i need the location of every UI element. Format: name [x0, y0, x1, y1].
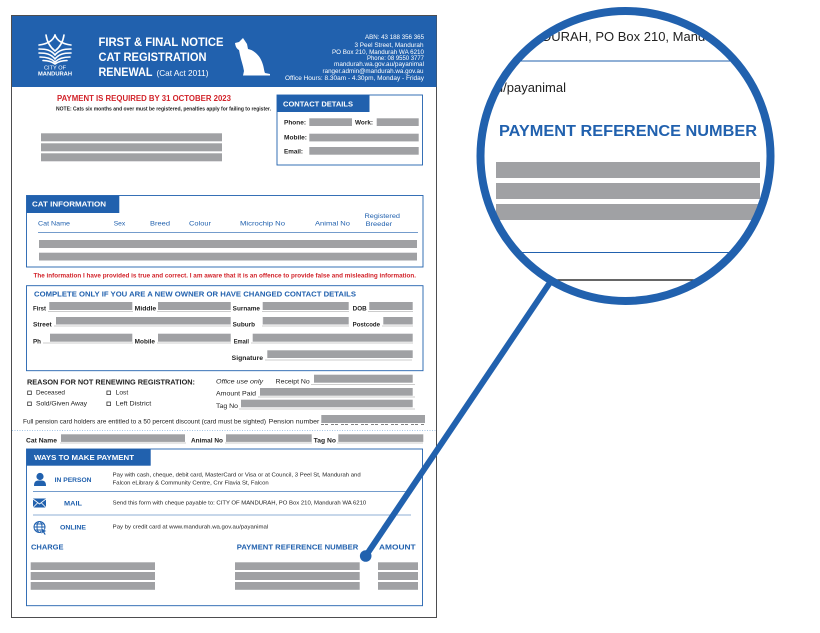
- payment table labels: PAYMENT REFERENCE NUMBER: [237, 545, 358, 552]
- registration note: NOTE: Cats six months and over must be registered, penalties apply for failing to register.: [56, 106, 271, 112]
- panel: new owner details: Suburb: [233, 323, 255, 329]
- redacted address: [41, 133, 222, 161]
- panel: new owner details: Signature: [232, 356, 264, 362]
- pension card note: Pension number: [269, 420, 319, 426]
- panel: contact details: Work:: [355, 121, 373, 127]
- icon: mail: [33, 498, 46, 508]
- panel: ways to make payment: Pay by credit card at www.mandurah.wa.gov.au/payanimal: [113, 525, 268, 531]
- panel: cat information: CAT INFORMATION: [32, 200, 106, 209]
- office use panel: [216, 375, 415, 410]
- panel: ways to make payment: Send this form with cheque payable to: CITY OF MANDURAH, PO Box 210, Mandurah WA 6210: [113, 500, 366, 506]
- council contact details: ranger.admin@mandurah.wa.gov.au: [322, 68, 424, 75]
- declaration statement: The information I have provided is true and correct. I am aware that it is an offence to provide false and misleading information.: [34, 274, 416, 280]
- icon: City of Mandurah logo: [38, 35, 72, 78]
- panel: cat information: Breeder: [366, 221, 393, 228]
- panel: new owner details: Ph: [33, 340, 41, 346]
- panel: cat information: Breed: [150, 221, 170, 228]
- magnified detail circle: [480, 11, 770, 301]
- reason for not renewing: Deceased: [36, 391, 65, 397]
- reason for not renewing: Left District: [116, 402, 152, 408]
- icon: City of Mandurah logo: CITY OF: [44, 66, 66, 72]
- panel: contact details: [277, 95, 422, 165]
- icon: City of Mandurah logo: MANDURAH: [38, 72, 72, 78]
- magnified detail circle: MANDURAH, PO Box 210, Mandurah WA: [513, 29, 756, 44]
- title: CAT REGISTRATION: [98, 52, 206, 64]
- panel: ways to make payment: Pay with cash, cheque, debit card, MasterCard or Visa or at Council, 3 Peel St, Mandurah and: [113, 472, 361, 478]
- panel: ways to make payment: IN PERSON: [55, 477, 92, 484]
- panel: new owner details: Mobile: [135, 340, 156, 346]
- office use panel: Receipt No: [276, 380, 310, 386]
- panel: cat information: Colour: [189, 221, 212, 228]
- panel: cat information: Animal No: [315, 221, 350, 228]
- office use panel: Tag No: [216, 404, 239, 410]
- panel: cat information: Sex: [114, 221, 126, 228]
- reason for not renewing: Sold/Given Away: [36, 402, 87, 408]
- payment table labels: AMOUNT: [379, 545, 416, 552]
- reason for not renewing: [27, 378, 195, 408]
- panel: contact details: Email:: [284, 150, 303, 156]
- pension card note: [23, 415, 425, 426]
- panel: contact details: CONTACT DETAILS: [283, 100, 353, 108]
- council contact details: Office Hours: 8.30am - 4.30pm, Monday - Friday: [285, 75, 425, 82]
- icon: person: [34, 473, 46, 486]
- tear-off cat details: Animal No: [191, 439, 223, 445]
- title: FIRST & FINAL NOTICE: [98, 37, 224, 49]
- office use panel: Amount Paid: [216, 392, 256, 398]
- panel: new owner details: COMPLETE ONLY IF YOU ARE A NEW OWNER OR HAVE CHANGED CONTACT DETAILS: [34, 290, 356, 299]
- panel: ways to make payment: Falcon eLibrary & Community Centre, Cnr Flavia St, Falcon: [113, 481, 269, 487]
- panel: cat information: Registered: [364, 213, 400, 220]
- panel: ways to make payment: ONLINE: [60, 525, 87, 532]
- reason for not renewing: REASON FOR NOT RENEWING REGISTRATION:: [27, 378, 195, 387]
- panel: new owner details: Middle: [135, 307, 157, 313]
- payment deadline: PAYMENT IS REQUIRED BY 31 OCTOBER 2023: [57, 94, 232, 103]
- title: RENEWAL: [98, 67, 152, 79]
- panel: ways to make payment: WAYS TO MAKE PAYMENT: [34, 453, 134, 462]
- council contact details: PO Box 210, Mandurah WA 6210: [332, 49, 424, 56]
- panel: new owner details: Email: [234, 340, 249, 346]
- reason for not renewing: Lost: [116, 391, 129, 397]
- pension card note: Full pension card holders are entitled to a 50 percent discount (card must be sighted): [23, 420, 266, 426]
- magnified redacted bars: [496, 162, 760, 220]
- office use panel: Office use only: [216, 380, 264, 386]
- payment table labels: CHARGE: [31, 545, 64, 552]
- magnified heading: PAYMENT REFERENCE NUMBER: [499, 123, 757, 140]
- panel: new owner details: [26, 286, 423, 371]
- council contact details: ABN: 43 188 356 365: [365, 34, 424, 41]
- payment table labels: [31, 545, 416, 552]
- header banner: [12, 16, 436, 87]
- icon: cat silhouette: [235, 38, 270, 76]
- panel: cat information: Cat Name: [38, 221, 70, 228]
- panel: new owner details: Surname: [233, 307, 261, 313]
- council contact details: mandurah.wa.gov.au/payanimal: [334, 61, 425, 68]
- council contact details: [285, 34, 425, 82]
- council contact details: 3 Peel Street, Mandurah: [354, 42, 424, 49]
- arrow: leader line to payment reference number: [360, 281, 551, 562]
- panel: contact details: Mobile:: [284, 136, 307, 142]
- council contact details: Phone: 08 9550 3777: [367, 55, 424, 62]
- panel: new owner details: Street: [33, 323, 52, 329]
- panel: new owner details: DOB: [353, 307, 367, 313]
- tear-off cat details: [26, 434, 423, 445]
- panel: ways to make payment: [26, 449, 422, 606]
- title: (Cat Act 2011): [156, 68, 209, 78]
- tear-off cat details: Tag No: [314, 439, 336, 445]
- panel: cat information: Microchip No: [240, 221, 285, 228]
- magnified detail circle: u/payanimal: [496, 80, 566, 95]
- icon: globe: [34, 522, 46, 535]
- panel: new owner details: First: [33, 307, 46, 313]
- tear-off cat details: Cat Name: [26, 439, 58, 445]
- panel: contact details: Phone:: [284, 121, 306, 127]
- panel: new owner details: Postcode: [353, 323, 381, 329]
- form page: [12, 16, 436, 618]
- panel: ways to make payment: MAIL: [64, 501, 82, 508]
- panel: cat information: [26, 196, 423, 267]
- redacted payment fields: [31, 562, 418, 590]
- title: [98, 37, 224, 79]
